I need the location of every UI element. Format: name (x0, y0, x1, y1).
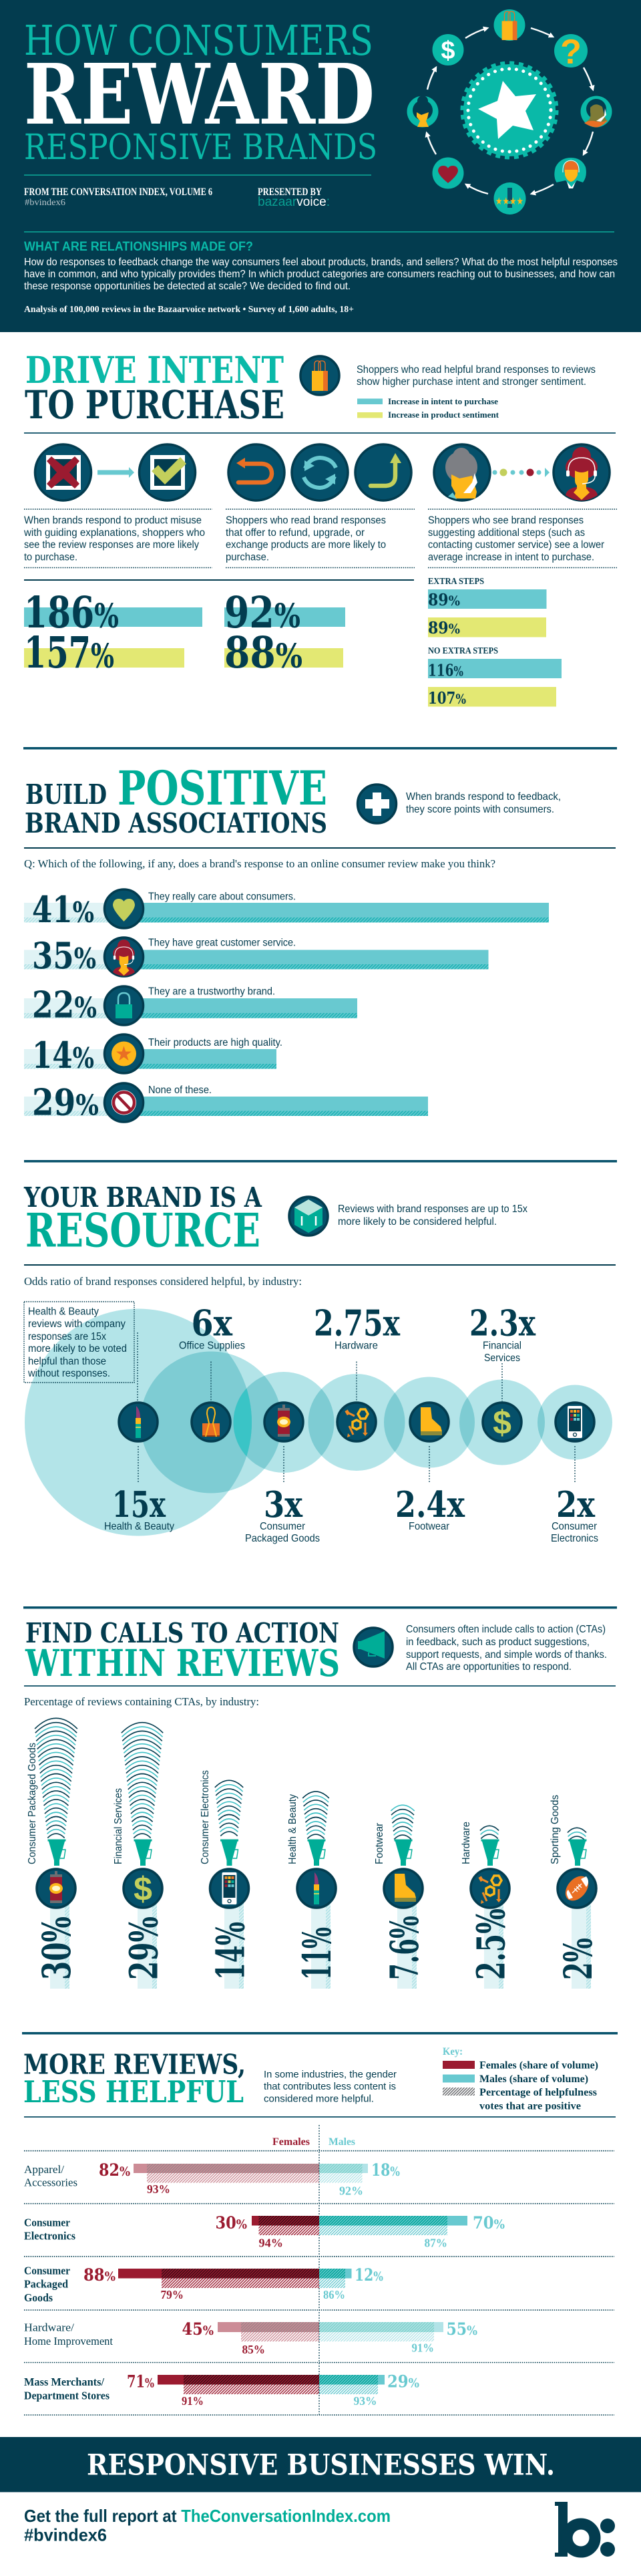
column: footwear 7.6% (374, 1805, 427, 1989)
bar chart: extra steps: NO EXTRA STEPS (428, 646, 498, 656)
bar chart: extra steps: 107% (428, 688, 466, 708)
icon: support agent (554, 444, 610, 500)
bar: 35%: They have great customer service. (148, 938, 296, 949)
label: 2.75x hardware: 2.75x (314, 1303, 400, 1344)
row: hardware / home improvement: Home Improvement (24, 2335, 113, 2347)
section description (357, 364, 596, 388)
icon: dollar (483, 1403, 521, 1441)
footer banner: RESPONSIVE BUSINESSES WIN. (87, 2448, 555, 2482)
row: consumer electronics: 30% (215, 2213, 247, 2233)
text: refund: purchase. (226, 552, 269, 563)
intro heading: WHAT ARE RELATIONSHIPS MADE OF? (24, 240, 253, 254)
column: financial services 29%: 29% (122, 1916, 167, 1980)
icon: return arrow (228, 444, 284, 500)
arrow (97, 467, 134, 478)
label: 2.3x financial services: Services (484, 1352, 520, 1364)
bar: 14% (24, 1034, 282, 1077)
presented by bazaarvoice (258, 186, 330, 209)
row: apparel / accessories: 92% (339, 2184, 363, 2197)
icon: plus (358, 784, 397, 823)
bar chart: misuse (24, 587, 202, 678)
column: consumer packaged goods 30% (27, 1718, 79, 1989)
title: HOW CONSUMERS (24, 16, 373, 65)
column: sporting goods 2%: 2% (556, 1938, 601, 1980)
row: mass merchants / department stores: 91% (182, 2394, 204, 2408)
section description: in feedback, such as product suggestions, (406, 1636, 590, 1648)
column: consumer packaged goods 30%: 30% (34, 1916, 79, 1980)
column: financial services 29% (113, 1723, 167, 1989)
legend: Increase in product sentiment (388, 410, 499, 420)
section description (338, 1203, 527, 1228)
column: footwear 7.6%: 7.6% (382, 1916, 427, 1980)
panel: build positive brand associations (23, 747, 617, 1124)
bar chart: refund: 92% (224, 587, 300, 638)
arrows (427, 28, 593, 194)
panel: find calls to action within reviews (23, 1606, 617, 1989)
bar: 14%: Their products are high quality. (148, 1037, 282, 1048)
title: RESPONSIVE BRANDS (24, 128, 377, 168)
section description: more likely to be considered helpful. (338, 1216, 497, 1228)
title: REWARD (24, 46, 375, 144)
label: 2x consumer electronics: 2x (556, 1484, 595, 1526)
section description: When brands respond to feedback, (406, 791, 561, 803)
bar: 41%: They really care about consumers. (148, 891, 296, 902)
text: additional steps: contacting customer service) see a lower (428, 539, 604, 551)
row: consumer packaged goods: 86% (323, 2288, 345, 2301)
label: 2.4x footwear: Footwear (409, 1521, 450, 1532)
title (24, 16, 377, 168)
label: 6x office supplies (179, 1303, 245, 1351)
bar: 22%: 22% (32, 983, 97, 1026)
heading: WITHIN REVIEWS (25, 1641, 340, 1685)
heading (25, 1617, 340, 1685)
column: financial services 29%: Financial Services (113, 1788, 124, 1864)
section description: All CTAs are opportunities to respond. (406, 1661, 572, 1673)
row: apparel / accessories: Apparel/ (24, 2163, 64, 2176)
text: additional steps: Shoppers who see brand responses (428, 515, 584, 527)
heading: MORE REVIEWS, (23, 2049, 246, 2081)
bar: 22% (24, 983, 357, 1026)
row: consumer packaged goods (24, 2264, 383, 2304)
central star badge (462, 63, 557, 158)
bar: 29% (24, 1081, 428, 1124)
row: apparel / accessories: 82% (99, 2160, 130, 2180)
key: Males (share of volume) (479, 2073, 588, 2085)
row: consumer electronics: Consumer (24, 2216, 70, 2229)
row: consumer electronics: 87% (425, 2236, 447, 2249)
chart subtitle: Percentage of reviews containing CTAs, by industry: (24, 1695, 259, 1708)
heading: BUILD (25, 778, 107, 811)
bar chart: extra steps: EXTRA STEPS (428, 577, 484, 587)
column: health and beauty 11% (287, 1792, 340, 1989)
row: hardware / home improvement: 91% (411, 2341, 434, 2355)
icon: woman on phone (434, 444, 490, 500)
intro text: these response opportunities be detected at scale? We decided to find out. (24, 281, 351, 292)
label: 2.3x financial services: Financial (483, 1340, 521, 1351)
heading: TO PURCHASE (25, 382, 284, 428)
icon: bag (300, 356, 339, 395)
dotted process (493, 468, 550, 477)
icon: woman silhouette (407, 96, 438, 127)
icon: binder clip (192, 1403, 230, 1441)
row: consumer packaged goods: 88% (83, 2265, 116, 2285)
column: hardware 2.5%: Hardware (461, 1822, 472, 1864)
section description (406, 791, 561, 815)
footer banner (0, 2437, 641, 2492)
icon: megaphone (354, 1628, 393, 1667)
panel: drive intent to purchase (23, 348, 617, 708)
row: hardware / home improvement: Hardware/ (24, 2321, 74, 2333)
column headings (272, 2136, 355, 2148)
report source: FROM THE CONVERSATION INDEX, VOLUME 6 (24, 186, 212, 198)
row: apparel / accessories: 18% (371, 2160, 400, 2180)
icon: shopping bag (494, 9, 525, 41)
icon: cube (289, 1197, 328, 1236)
label: 2x consumer electronics: Electronics (551, 1533, 598, 1544)
row: apparel / accessories: 93% (147, 2182, 170, 2196)
column: consumer electronics 14%: 14% (208, 1922, 254, 1980)
label: 3x consumer packaged goods: Packaged Goods (245, 1533, 320, 1544)
row: mass merchants / department stores: Department Stores (24, 2390, 110, 2402)
callout: more likely to be voted (28, 1343, 127, 1354)
section description: they score points with consumers. (406, 804, 554, 815)
call to action (24, 2506, 391, 2545)
column: health and beauty 11%: Health & Beauty (287, 1794, 298, 1864)
heading: BRAND ASSOCIATIONS (25, 807, 327, 839)
callout: helpful than those (28, 1356, 106, 1367)
bar chart: extra steps: 116% (428, 660, 463, 680)
icon: woman on phone (581, 96, 612, 127)
icon: question mark (554, 33, 588, 71)
column: consumer electronics 14%: Consumer Electronics (200, 1770, 211, 1864)
call to action: #bvindex6 (24, 2525, 107, 2545)
label: 3x consumer packaged goods: Consumer (260, 1521, 306, 1532)
section description: Consumers often include calls to action (CTAs) (406, 1624, 606, 1635)
heading (23, 2049, 246, 2110)
icon: exchange arrows (292, 444, 348, 500)
legend: Increase in intent to purchase (388, 396, 498, 406)
row: hardware / home improvement (24, 2319, 477, 2356)
column: sporting goods 2% (550, 1795, 601, 1989)
heading (25, 760, 327, 839)
column headings: Males (329, 2136, 355, 2148)
label: 3x consumer packaged goods (245, 1484, 320, 1544)
heading: LESS HELPFUL (23, 2074, 244, 2110)
presented by bazaarvoice: PRESENTED BY (258, 186, 322, 198)
heading: DRIVE INTENT (25, 348, 284, 392)
label: 2.3x financial services: 2.3x (469, 1303, 536, 1344)
row: apparel / accessories: Accessories (24, 2176, 77, 2189)
bar chart: extra steps (428, 577, 562, 708)
report source (24, 186, 212, 208)
text: misuse (23, 515, 205, 563)
row: consumer packaged goods: Packaged (24, 2277, 69, 2291)
heading: YOUR BRAND IS A (23, 1181, 262, 1213)
icon: dollar: $ (441, 37, 455, 65)
section description: that contributes less content is (264, 2081, 396, 2092)
bar: 22%: They are a trustworthy brand. (148, 986, 275, 997)
label: 15x health and beauty: 15x (112, 1484, 166, 1526)
header panel (0, 0, 641, 332)
column: footwear 7.6%: Footwear (374, 1822, 385, 1864)
column headings: Females (272, 2136, 310, 2148)
key: Females (share of volume) (479, 2059, 598, 2071)
legend (357, 396, 499, 420)
icon: exclamation and stars: ★★★★ (495, 196, 523, 207)
key (443, 2046, 598, 2112)
row: consumer packaged goods: Consumer (24, 2264, 70, 2277)
icon: support agent (554, 158, 586, 188)
section description: Reviews with brand responses are up to 15x (338, 1203, 527, 1215)
label: 15x health and beauty: Health & Beauty (104, 1521, 174, 1532)
intro text (24, 257, 618, 292)
icon: dollar (433, 34, 463, 65)
label: 6x office supplies: 6x (191, 1303, 232, 1344)
icon: heart (433, 158, 463, 188)
section description: show higher purchase intent and stronger sentiment. (357, 376, 586, 388)
text: additional steps (428, 515, 604, 563)
section description: In some industries, the gender (264, 2069, 397, 2080)
text: refund (226, 515, 386, 563)
heading: FIND CALLS TO ACTION (25, 1617, 339, 1649)
key: votes that are positive (479, 2101, 581, 2112)
row: consumer electronics: 94% (259, 2236, 283, 2249)
bar: 41% (24, 888, 549, 931)
survey question: Q: Which of the following, if any, does a brand's response to an online consumer review make you think? (24, 857, 495, 870)
key: Key: (443, 2046, 463, 2057)
callout: Health & Beauty (28, 1306, 99, 1318)
section description (406, 1624, 607, 1673)
row: hardware / home improvement: 85% (242, 2343, 265, 2356)
row: consumer electronics: 70% (473, 2213, 505, 2233)
bubble chart (25, 1308, 612, 1536)
text: refund: that offer to refund, upgrade, or (226, 527, 365, 539)
label: 3x consumer packaged goods: 3x (264, 1484, 302, 1526)
text: additional steps: average increase in intent to purchase. (428, 552, 594, 563)
row: mass merchants / department stores: 71% (127, 2372, 154, 2391)
icon: misuse cross (35, 444, 91, 500)
bar: 14%: ★ (115, 1043, 133, 1065)
row: mass merchants / department stores: Mass Merchants/ (24, 2376, 104, 2388)
icon: exclamation and stars (494, 182, 526, 214)
label: 6x office supplies: Office Supplies (179, 1340, 245, 1351)
row: mass merchants / department stores: 29% (387, 2372, 419, 2391)
section description: Shoppers who read helpful brand responses to reviews (357, 364, 596, 376)
bar chart: extra steps: 89% (428, 590, 460, 609)
bar: 29%: None of these. (148, 1085, 212, 1096)
panel: more reviews, less helpful (22, 2032, 618, 2415)
bar: 35%: 35% (32, 934, 96, 977)
row: mass merchants / department stores: 93% (354, 2394, 377, 2408)
row: consumer packaged goods: Goods (24, 2291, 53, 2304)
bar chart: refund (224, 587, 345, 678)
label: 2.75x hardware: Hardware (335, 1340, 378, 1351)
presented by bazaarvoice: bazaarvoice: (258, 195, 330, 209)
label: 2x consumer electronics (551, 1484, 598, 1544)
heading: RESOURCE (25, 1204, 260, 1258)
row: apparel / accessories (24, 2160, 400, 2197)
report source: #bvindex6 (25, 198, 65, 208)
section description (264, 2069, 397, 2105)
column: consumer electronics 14% (200, 1770, 254, 1989)
bar: 41%: 41% (32, 888, 94, 931)
row: hardware / home improvement: 45% (182, 2319, 214, 2339)
row: consumer electronics (24, 2213, 505, 2249)
bar: 14%: 14% (32, 1034, 94, 1077)
row: consumer electronics: Electronics (24, 2229, 75, 2243)
column: sporting goods 2%: Sporting Goods (550, 1795, 561, 1864)
text: additional steps: suggesting additional steps (such as (428, 527, 585, 539)
callout (24, 1302, 134, 1383)
column: hardware 2.5% (461, 1822, 514, 1989)
callout: responses are 15x (28, 1331, 106, 1342)
text: misuse: with guiding explanations, shoppers who (23, 527, 205, 539)
row: consumer packaged goods: 79% (160, 2288, 184, 2301)
label: 2x consumer electronics: Consumer (552, 1521, 598, 1532)
text: refund: Shoppers who read brand responses (226, 515, 386, 527)
chart subtitle: Odds ratio of brand responses considered helpful, by industry: (24, 1275, 302, 1288)
label: 2.3x financial services (469, 1303, 536, 1364)
panel: your brand is a resource (23, 1160, 617, 1544)
column: financial services 29%: $ (134, 1870, 152, 1908)
icon: boot (410, 1403, 449, 1441)
section description: considered more helpful. (264, 2093, 374, 2105)
bar chart: misuse: 186% (24, 587, 119, 638)
icon: upgrade arrow (355, 444, 411, 500)
callout: reviews with company (28, 1318, 126, 1330)
column: consumer packaged goods 30%: Consumer Packaged Goods (27, 1743, 38, 1864)
logo: b (555, 2502, 615, 2557)
icon: question mark: ? (560, 33, 582, 71)
text: misuse: to purchase. (24, 552, 77, 563)
bar chart: refund: 88% (224, 627, 302, 678)
label: 2.4x footwear: 2.4x (395, 1484, 465, 1526)
icon: check box (139, 444, 195, 500)
bar chart: extra steps: 89% (428, 618, 460, 637)
icon: nuts and bolts (337, 1403, 376, 1441)
row: mass merchants / department stores (24, 2372, 419, 2408)
heading (25, 348, 284, 428)
icon: phone (556, 1403, 594, 1441)
bar: 29%: 29% (32, 1081, 99, 1124)
text: refund: exchange products are more likely to (226, 539, 386, 551)
icon: lipstick (119, 1403, 158, 1441)
key: Percentage of helpfulness (479, 2087, 597, 2098)
cycle graphic (407, 9, 612, 214)
heading (23, 1181, 262, 1258)
row: hardware / home improvement: 55% (446, 2319, 477, 2339)
label: 15x health and beauty (104, 1484, 174, 1532)
icon: dollar: $ (493, 1404, 511, 1441)
bar: 35% (24, 934, 489, 977)
column: hardware 2.5%: 2.5% (469, 1908, 514, 1980)
column: health and beauty 11%: 11% (294, 1927, 340, 1980)
heading: POSITIVE (118, 760, 327, 816)
call to action: Get the full report at TheConversationIndex.com (24, 2506, 391, 2526)
section description: support requests, and simple words of thanks. (406, 1649, 607, 1661)
text: misuse: When brands respond to product misuse (24, 515, 202, 527)
row: consumer packaged goods: 12% (355, 2265, 383, 2285)
callout: without responses. (27, 1368, 110, 1379)
icon: can (264, 1403, 303, 1441)
text: misuse: see the review responses are more likely (24, 539, 199, 551)
bar chart: misuse: 157% (24, 627, 114, 678)
methodology note: Analysis of 100,000 reviews in the Bazaarvoice network • Survey of 1,600 adults, 18+ (24, 305, 354, 315)
